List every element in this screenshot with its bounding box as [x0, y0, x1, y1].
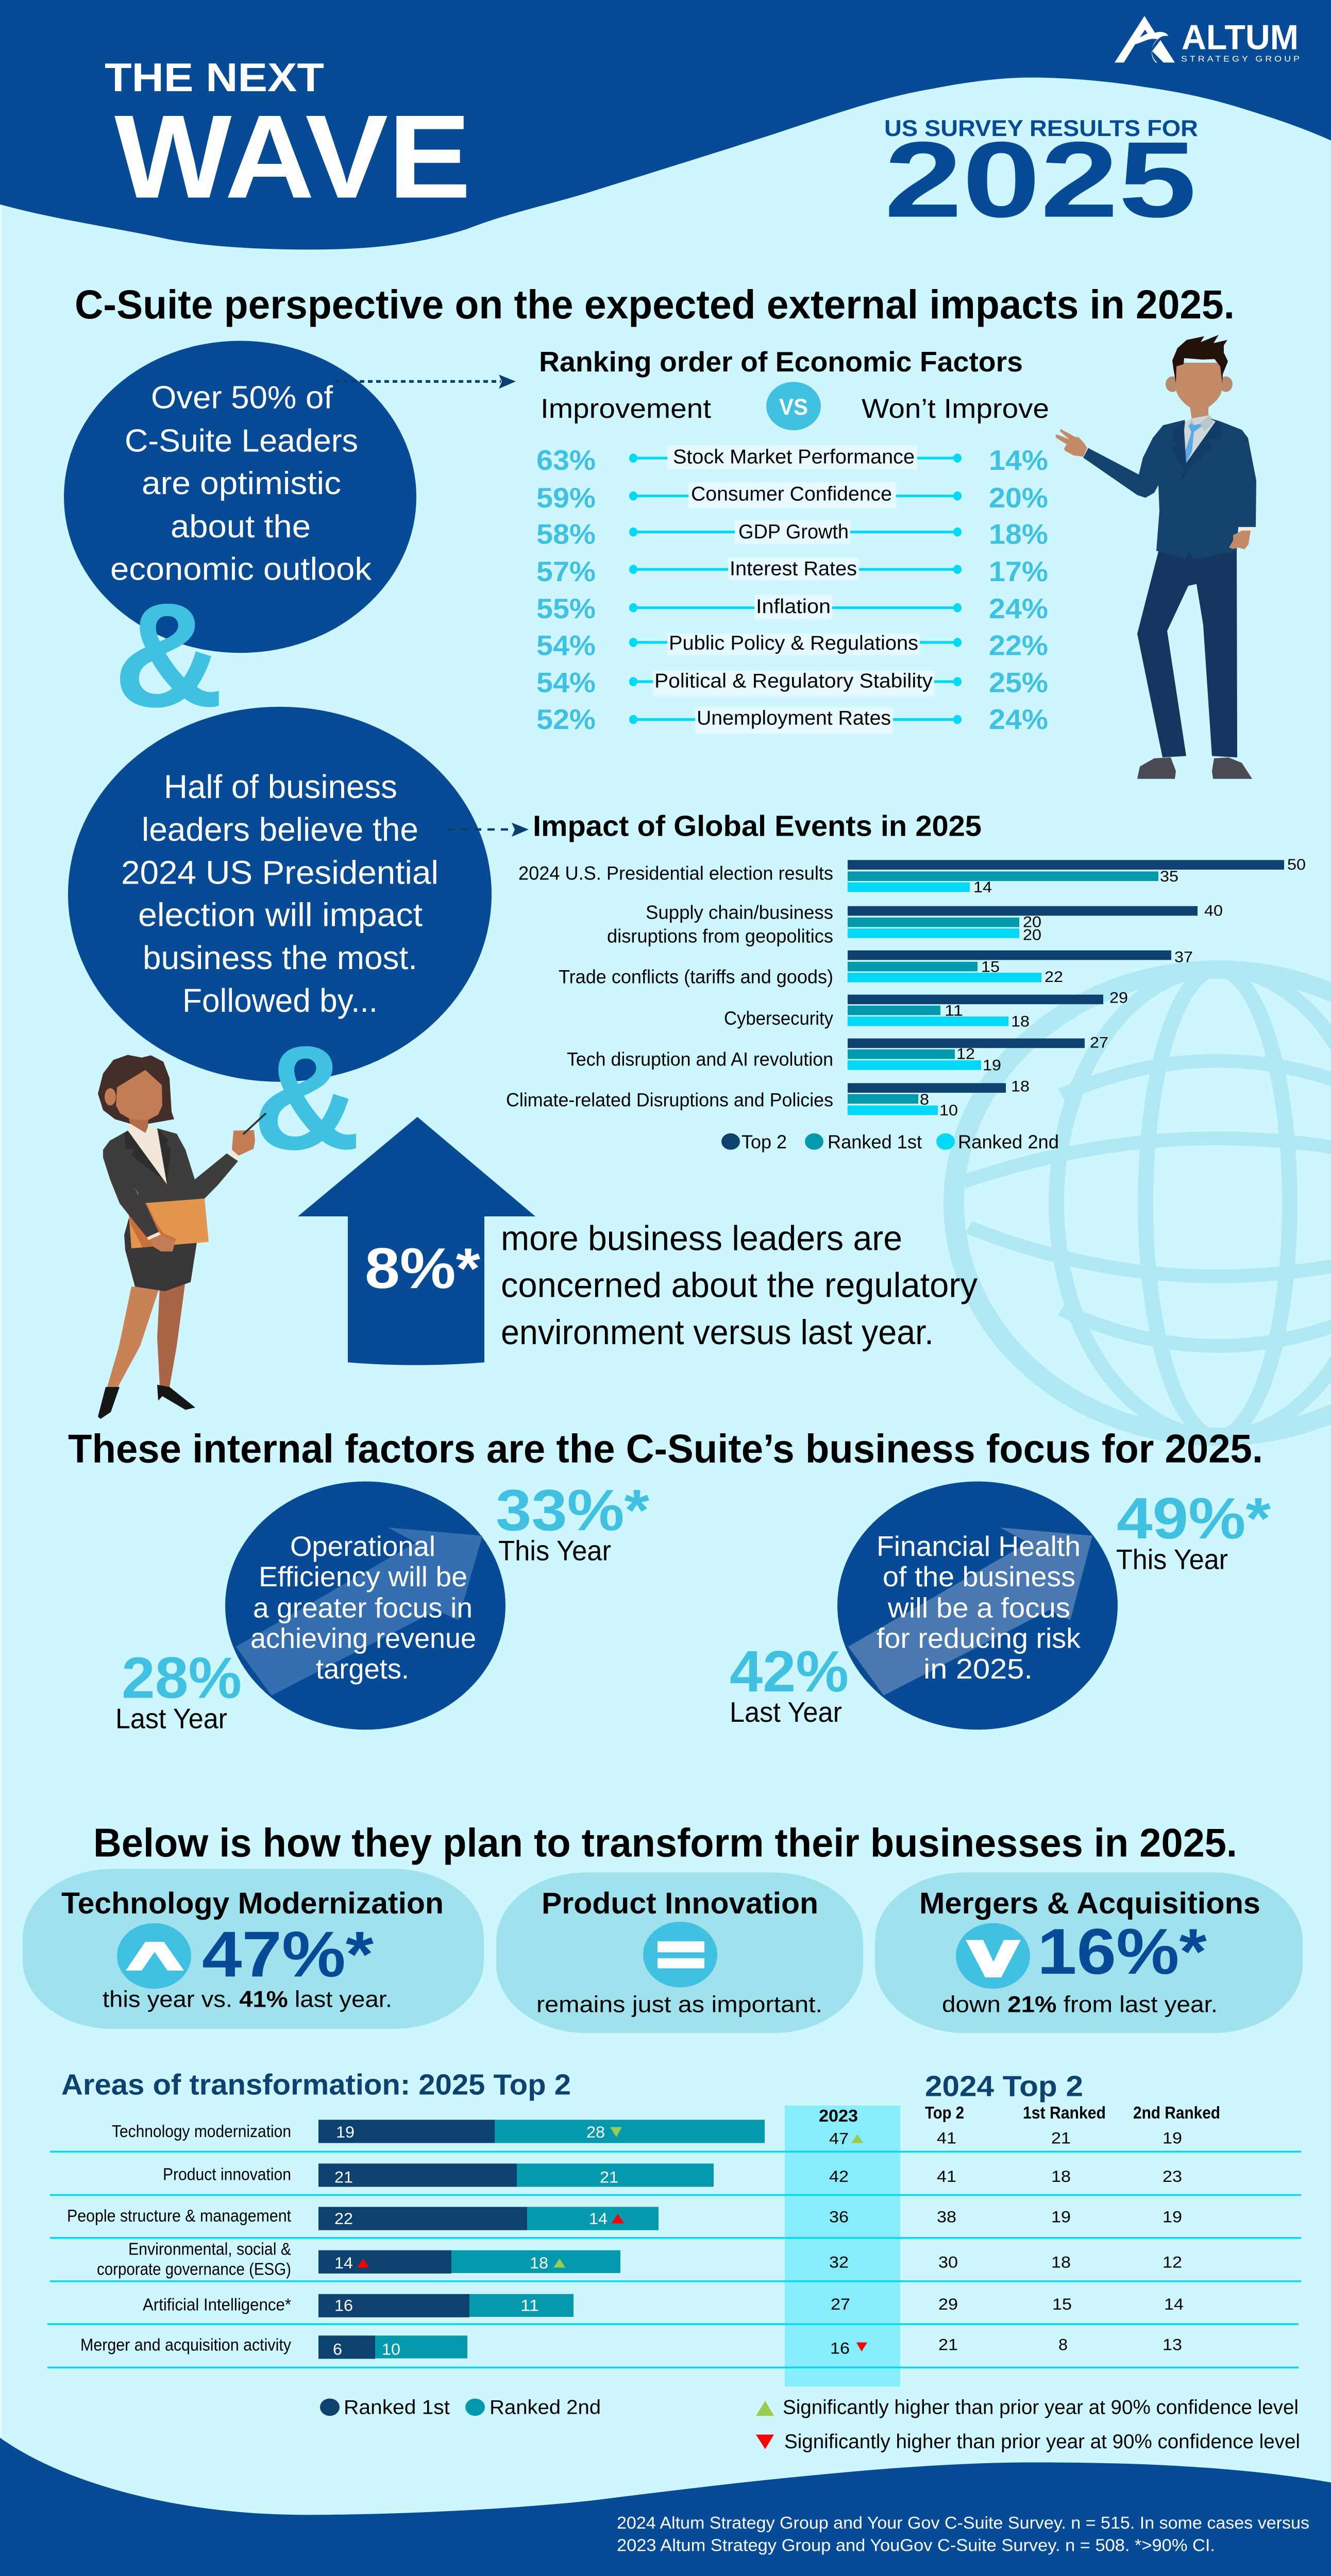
group: cybersecurity: 29: [1109, 989, 1128, 1006]
up arrow with 8%: 8%*: [365, 1236, 481, 1300]
row: product innovation: 42: [829, 2167, 849, 2185]
row: unemployment: [536, 704, 1048, 735]
stat: this year 49%: 49%*: [1117, 1486, 1271, 1551]
heading: 2024 top 2: 2024 Top 2: [925, 2070, 1083, 2103]
row: people structure: 22: [334, 2210, 353, 2228]
circle callout: presidential election: 2024 US Presidential: [121, 854, 439, 891]
row: product innovation: 21: [600, 2168, 618, 2187]
row: public policy: 54%: [536, 630, 596, 662]
group: cybersecurity: [724, 989, 1128, 1030]
row: GDP growth: 18%: [989, 519, 1048, 550]
text: regulatory environment: concerned about the regulatory: [501, 1266, 978, 1305]
row: technology modernization: 19: [1162, 2129, 1182, 2147]
row: product innovation: Product innovation: [163, 2164, 291, 2184]
circle with growth arrow: Efficiency will be: [259, 1561, 467, 1592]
row: product innovation: 18: [1051, 2167, 1071, 2185]
pill: product innovation: remains just as important.: [536, 1992, 822, 2018]
row: interest rates: Interest Rates: [730, 557, 857, 580]
row: artificial intelligence: [143, 2294, 1184, 2317]
icon: down chevron: [956, 1923, 1030, 1989]
subtitle: US survey results for 2025: US SURVEY RESULTS FOR: [884, 116, 1198, 141]
pill: product innovation: [496, 1872, 863, 2033]
illustration: businesswoman: [98, 1055, 266, 1419]
footer source note: 2023 Altum Strategy Group and YouGov C-Suite Survey. n = 508. *>90% CI.: [617, 2535, 1215, 2555]
row: merger and acquisition: 8: [1058, 2336, 1068, 2354]
row: unemployment: 52%: [536, 704, 596, 735]
group: cybersecurity: Cybersecurity: [724, 1008, 833, 1029]
pill: mergers and acquisitions: Mergers & Acquisitions: [919, 1887, 1260, 1920]
vs badge: VS: [779, 395, 808, 420]
row: people structure: People structure & management: [67, 2206, 291, 2225]
row: product innovation: [163, 2163, 1182, 2187]
circle with growth arrow: achieving revenue: [250, 1623, 476, 1654]
group: tech disruption: [567, 1034, 1108, 1074]
row: stock market: Stock Market Performance: [673, 445, 915, 468]
ampersand 1: &: [113, 572, 224, 738]
legend: ranked 1st and 2nd: Ranked 2nd: [490, 2396, 601, 2418]
2023 highlighted column: [785, 2106, 900, 2386]
row: consumer confidence: 59%: [536, 482, 596, 514]
row: technology modernization: 47: [829, 2129, 849, 2148]
row: people structure: 14: [589, 2210, 608, 2228]
group: election results: [518, 856, 1306, 896]
row: ESG: 14: [334, 2254, 353, 2273]
row: artificial intelligence: 16: [334, 2296, 353, 2315]
circle callout: presidential election: [68, 707, 492, 1082]
row: ESG: 30: [938, 2253, 958, 2272]
group: supply chain: Supply chain/business: [646, 902, 833, 923]
up arrow with 8%: [298, 1117, 535, 1365]
pill: mergers and acquisitions: 16%*: [1037, 1916, 1207, 1988]
table column headers: [819, 2103, 1220, 2125]
group: election results: 14: [973, 879, 992, 896]
group: trade conflicts: 15: [981, 958, 1000, 975]
row: interest rates: [536, 556, 1048, 587]
logo: Altum Strategy Group: ALTUM: [1182, 19, 1299, 57]
legend: ranked 1st and 2nd: Ranked 1st: [344, 2396, 450, 2418]
footer wave: [0, 2438, 1331, 2576]
row: political stability: 54%: [536, 667, 596, 699]
group: climate: 18: [1011, 1078, 1030, 1095]
row: public policy: 22%: [989, 630, 1048, 662]
row: consumer confidence: Consumer Confidence: [691, 482, 892, 505]
circle with growth arrow: Operational: [290, 1531, 435, 1562]
circle callout: presidential election: election will impact: [138, 897, 423, 934]
row: artificial intelligence: 14: [1164, 2295, 1184, 2313]
row: artificial intelligence: 11: [520, 2296, 539, 2315]
row: stock market: [536, 445, 1048, 476]
row: people structure: 36: [829, 2208, 849, 2226]
circle with growth arrow: a greater focus in: [253, 1592, 473, 1624]
improvement column heading: Improvement: [541, 394, 711, 424]
group: supply chain: [607, 902, 1223, 947]
circle callout: presidential election: leaders believe the: [142, 811, 418, 848]
group: supply chain: 20: [1023, 913, 1041, 930]
chart legend: Top 2: [742, 1131, 787, 1153]
stat: this year 33%: This Year: [498, 1535, 611, 1567]
pill: technology modernization: [23, 1869, 484, 2029]
row: technology modernization: 41: [937, 2129, 956, 2147]
row: political stability: [536, 667, 1048, 699]
won't improve column heading: Won’t Improve: [862, 394, 1049, 424]
chart legend: [721, 1131, 1059, 1153]
header wave: [0, 0, 1331, 249]
row: people structure: [67, 2206, 1182, 2230]
circle callout: over 50% optimistic: economic outlook: [110, 551, 372, 587]
legend: ranked 1st and 2nd: [320, 2396, 601, 2418]
row: merger and acquisition: 6: [333, 2340, 342, 2359]
row: merger and acquisition: 13: [1162, 2336, 1182, 2354]
row: interest rates: 57%: [536, 556, 596, 587]
row: interest rates: 17%: [989, 556, 1048, 587]
row: stock market: 14%: [989, 445, 1048, 476]
circle with growth arrow: will be a focus: [887, 1592, 1070, 1624]
group: climate: Climate-related Disruptions and Policies: [506, 1090, 833, 1111]
row: product innovation: 41: [937, 2167, 956, 2185]
circle callout: presidential election: Followed by...: [182, 982, 378, 1019]
row: political stability: Political & Regulatory Stability: [654, 669, 933, 692]
stat: last year 28%: Last Year: [115, 1703, 227, 1735]
row: artificial intelligence: 29: [938, 2295, 958, 2313]
row: GDP growth: [536, 519, 1048, 550]
footer source note: [617, 2513, 1309, 2555]
title: WAVE: [114, 91, 471, 223]
row: merger and acquisition: [80, 2335, 1182, 2359]
vs badge: [766, 382, 821, 430]
legend: significance markers: [756, 2396, 1300, 2452]
row: technology modernization: 19: [336, 2123, 355, 2141]
ampersand 2: &: [252, 1015, 361, 1181]
row: ESG: 12: [1162, 2253, 1182, 2272]
circle with growth arrow: in 2025.: [923, 1653, 1033, 1685]
stat: last year 28%: [115, 1645, 242, 1735]
row: inflation: Inflation: [756, 595, 831, 618]
row: product innovation: 21: [334, 2168, 353, 2187]
row: ESG: 18: [1051, 2253, 1071, 2272]
pill: product innovation: Product Innovation: [542, 1887, 818, 1920]
heading: areas of transformation: Areas of transformation: 2025 Top 2: [61, 2068, 571, 2101]
row: political stability: 25%: [989, 667, 1048, 699]
group: trade conflicts: 22: [1044, 969, 1063, 985]
row: unemployment: Unemployment Rates: [697, 706, 891, 729]
row: inflation: 24%: [989, 593, 1048, 624]
globe watermark: [944, 960, 1331, 1446]
group: election results: 2024 U.S. Presidential election results: [518, 863, 833, 884]
group: election results: 35: [1160, 868, 1178, 885]
circle callout: presidential election: Half of business: [164, 769, 397, 805]
circle with growth arrow: [837, 1481, 1118, 1730]
row: ESG: 18: [530, 2254, 548, 2273]
pill: mergers and acquisitions: [875, 1872, 1303, 2033]
row: artificial intelligence: Artificial Intelligence*: [143, 2295, 291, 2314]
stat: last year 42%: 42%: [730, 1639, 849, 1704]
group: trade conflicts: [559, 948, 1193, 988]
pill: technology modernization: Technology Modernization: [61, 1887, 444, 1920]
stat: last year 42%: [730, 1639, 849, 1728]
title: THE NEXT: [105, 55, 324, 100]
panel: ranking of economic factors: [536, 346, 1049, 735]
row: product innovation: 23: [1162, 2167, 1182, 2185]
row: public policy: Public Policy & Regulations: [669, 631, 918, 654]
row: merger and acquisition: 21: [938, 2336, 958, 2354]
row: inflation: [536, 593, 1048, 624]
icon: up chevron: [117, 1923, 191, 1989]
chart heading: Impact of Global Events in 2025: [533, 809, 982, 842]
illustration: businessman: [1055, 335, 1256, 779]
table column headers: 1st Ranked: [1023, 2103, 1106, 2122]
group: climate: [506, 1078, 1030, 1119]
circle with growth arrow: targets.: [316, 1653, 409, 1685]
subtitle: US survey results for 2025: 2025: [884, 120, 1197, 240]
row: ESG: Environmental, social &: [128, 2240, 291, 2259]
circle callout: over 50% optimistic: Over 50% of: [151, 380, 333, 416]
chart legend: Ranked 1st: [828, 1131, 922, 1153]
arrow: dashed to global events: [447, 823, 529, 837]
row: ESG: [97, 2240, 1182, 2279]
stat: last year 28%: 28%: [122, 1645, 242, 1710]
stat: last year 42%: Last Year: [730, 1697, 842, 1728]
circle with growth arrow: of the business: [883, 1561, 1075, 1592]
pill: technology modernization: 47%*: [202, 1919, 374, 1991]
icon: equals: [643, 1922, 717, 1988]
table column headers: 2023: [819, 2106, 858, 2125]
row: artificial intelligence: 27: [831, 2295, 850, 2313]
row: consumer confidence: [536, 482, 1048, 514]
group: supply chain: 20: [1023, 926, 1041, 943]
row: ESG: corporate governance (ESG): [97, 2260, 291, 2279]
row: technology modernization: [112, 2120, 1182, 2148]
text: regulatory environment: [501, 1219, 978, 1352]
row: merger and acquisition: 10: [382, 2340, 400, 2359]
panel: impact of global events bar chart: [506, 809, 1306, 1153]
circle callout: presidential election: business the most.: [143, 940, 417, 976]
row: people structure: 38: [937, 2208, 956, 2226]
row: consumer confidence: 20%: [989, 482, 1048, 514]
row: technology modernization: 28: [586, 2123, 605, 2141]
row: merger and acquisition: 16: [830, 2340, 850, 2358]
group: climate: 10: [939, 1102, 958, 1119]
pill: technology modernization: this year vs. 41% last year.: [103, 1987, 392, 2012]
row: artificial intelligence: 15: [1052, 2295, 1072, 2313]
row: unemployment: 24%: [989, 704, 1048, 735]
logo: Altum Strategy Group: [1115, 16, 1300, 63]
circle with growth arrow: for reducing risk: [877, 1623, 1081, 1654]
row: technology modernization: 21: [1051, 2129, 1071, 2147]
text: regulatory environment: environment versus last year.: [501, 1313, 934, 1352]
row: GDP growth: GDP Growth: [738, 520, 849, 543]
circle callout: over 50% optimistic: about the: [171, 509, 311, 545]
circle callout: over 50% optimistic: C-Suite Leaders: [125, 423, 358, 459]
group: election results: 50: [1287, 856, 1306, 873]
stat: this year 49%: This Year: [1116, 1544, 1228, 1575]
row: merger and acquisition: Merger and acquisition activity: [80, 2335, 291, 2354]
logo: Altum Strategy Group: STRATEGY GROUP: [1181, 54, 1300, 63]
group: climate: 8: [920, 1091, 929, 1108]
row: ESG: 32: [829, 2253, 849, 2272]
group: supply chain: 40: [1204, 902, 1223, 919]
ranking heading: Ranking order of Economic Factors: [539, 346, 1023, 378]
group: trade conflicts: 37: [1174, 948, 1193, 965]
group: tech disruption: 27: [1090, 1034, 1108, 1051]
row: technology modernization: Technology modernization: [112, 2122, 291, 2141]
row: stock market: 63%: [536, 445, 596, 476]
group: trade conflicts: Trade conflicts (tariffs and goods): [559, 967, 833, 988]
circle with growth arrow: Financial Health: [877, 1531, 1081, 1562]
row: people structure: 19: [1162, 2208, 1182, 2226]
stat: this year 33%: 33%*: [496, 1478, 649, 1543]
circle callout: over 50% optimistic: are optimistic: [142, 466, 341, 501]
pill: mergers and acquisitions: down 21% from last year.: [942, 1992, 1218, 2018]
group: tech disruption: 19: [983, 1057, 1001, 1074]
circle callout: over 50% optimistic: [64, 341, 416, 653]
panel: financial health: [730, 1481, 1271, 1730]
arrow: dotted to ranking: [335, 375, 516, 389]
row: people structure: 19: [1051, 2208, 1071, 2226]
group: cybersecurity: 18: [1011, 1013, 1030, 1030]
row: public policy: [536, 630, 1048, 662]
group: tech disruption: 12: [956, 1045, 975, 1062]
text: regulatory environment: more business leaders are: [501, 1219, 902, 1258]
panel: operational efficiency: [115, 1478, 649, 1735]
row: GDP growth: 58%: [536, 519, 596, 550]
table column headers: Top 2: [925, 2103, 964, 2122]
circle with growth arrow: [225, 1481, 506, 1730]
group: tech disruption: Tech disruption and AI revolution: [567, 1049, 833, 1070]
group: cybersecurity: 11: [945, 1002, 963, 1019]
row: inflation: 55%: [536, 593, 596, 624]
chart legend: Ranked 2nd: [958, 1131, 1059, 1153]
group: supply chain: disruptions from geopolitics: [607, 926, 833, 947]
table column headers: 2nd Ranked: [1133, 2103, 1220, 2122]
